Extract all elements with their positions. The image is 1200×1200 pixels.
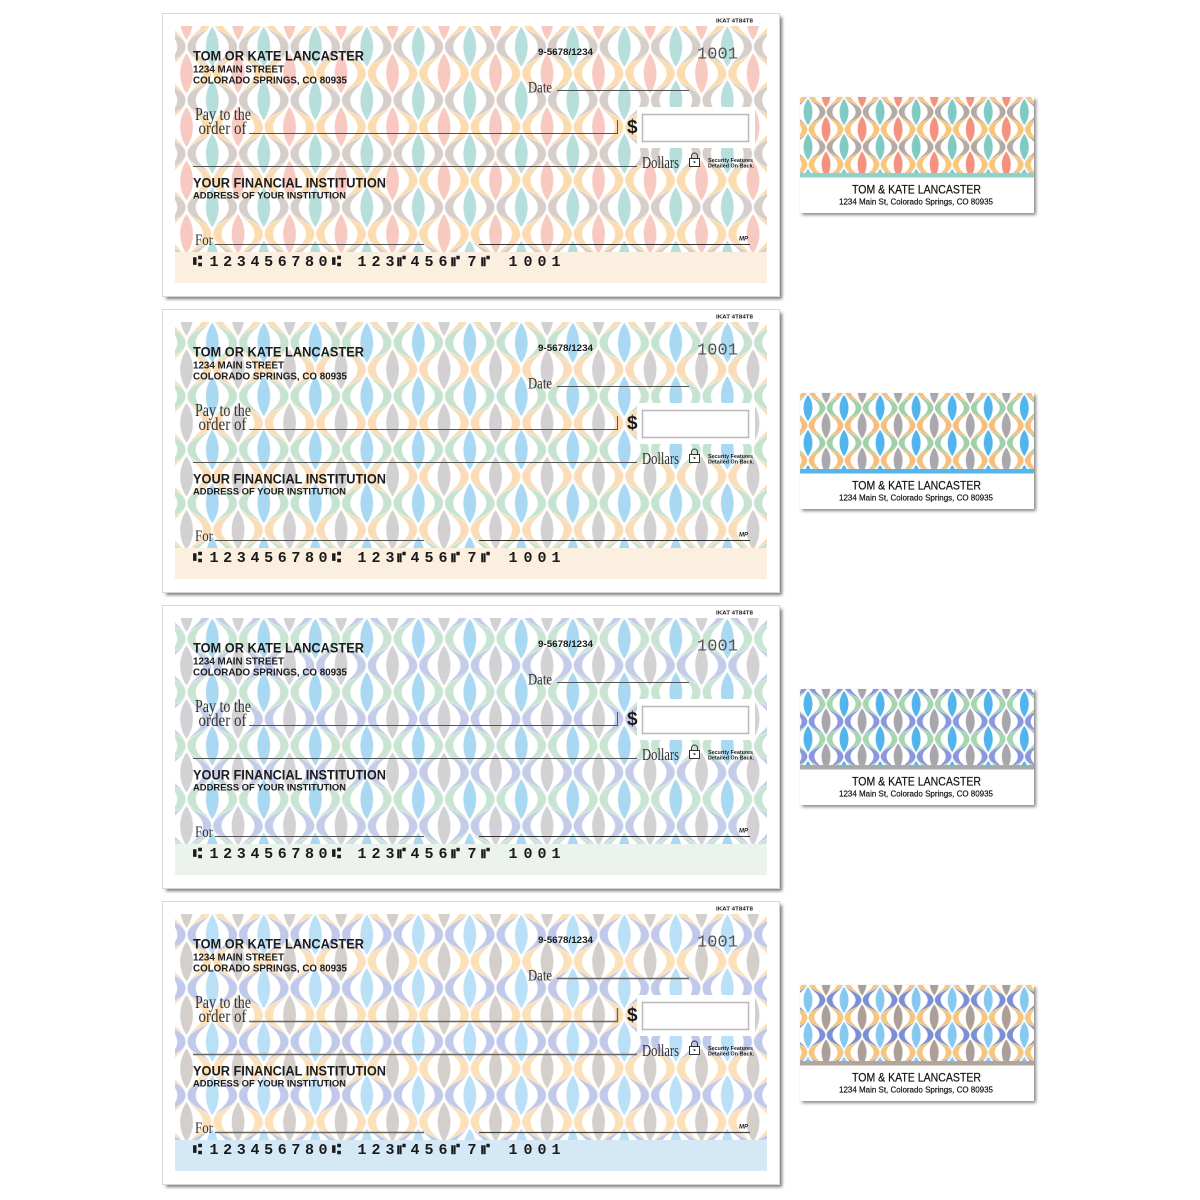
- icon: padlock: [690, 745, 700, 758]
- memo line: For: [195, 824, 214, 841]
- colour bar: [800, 173, 1034, 178]
- check shadow and paper: [162, 606, 782, 891]
- security note: [708, 1046, 755, 1057]
- style code: IKAT 4T84T8: [716, 19, 753, 25]
- amount line: Dollars: [642, 1041, 679, 1060]
- MICR line: ⑆123456780⑆123⑈456⑈7⑈1001: [193, 254, 561, 271]
- pattern background: [175, 26, 767, 252]
- payee field: [195, 992, 618, 1026]
- amount line: Dollars: [642, 153, 679, 172]
- check number: 1001: [697, 638, 738, 656]
- label pattern: [800, 985, 1034, 1061]
- amount panel: [637, 107, 755, 148]
- payee field: order of: [198, 118, 246, 138]
- bank: [193, 176, 386, 202]
- signature line: MP: [739, 829, 749, 835]
- MICR band: [175, 252, 767, 283]
- style code: IKAT 4T84T8: [716, 907, 753, 913]
- routing fraction: 9-5678/1234: [538, 343, 594, 354]
- label pattern: [800, 393, 1034, 469]
- MICR band: [175, 844, 767, 875]
- bank: ADDRESS OF YOUR INSTITUTION: [193, 191, 346, 202]
- dollar sign: $: [627, 117, 638, 138]
- pattern background: [175, 618, 767, 844]
- panel: check 2: [162, 310, 782, 595]
- account holder: [193, 48, 364, 86]
- security note: Detailed On Back.: [708, 163, 755, 169]
- payee field: Pay to the: [195, 696, 251, 716]
- security note: [708, 158, 755, 169]
- payee field: [195, 104, 618, 138]
- bank: [193, 1064, 386, 1090]
- colour bar: [800, 765, 1034, 770]
- payee field: [195, 696, 618, 730]
- MICR line: ⑆123456780⑆123⑈456⑈7⑈1001: [193, 550, 561, 567]
- account holder: 1234 MAIN STREET: [193, 360, 284, 371]
- MICR band: [175, 1140, 767, 1171]
- check shadow and paper: [162, 310, 782, 595]
- colour bar: [800, 469, 1034, 474]
- routing fraction: 9-5678/1234: [538, 639, 594, 650]
- MICR line: ⑆123456780⑆123⑈456⑈7⑈1001: [193, 1142, 561, 1159]
- security note: Detailed On Back.: [708, 755, 755, 761]
- bank: YOUR FINANCIAL INSTITUTION: [193, 1064, 386, 1079]
- signature line: MP: [739, 1125, 749, 1131]
- account holder: [193, 640, 364, 678]
- bank: [193, 472, 386, 498]
- account holder: COLORADO SPRINGS, CO 80935: [193, 76, 347, 86]
- label address: [839, 184, 993, 206]
- amount panel: [637, 995, 755, 1036]
- account holder: TOM OR KATE LANCASTER: [193, 640, 364, 656]
- amount line: Dollars: [642, 449, 679, 468]
- dollar sign: $: [627, 709, 638, 730]
- bank: ADDRESS OF YOUR INSTITUTION: [193, 487, 346, 498]
- label pattern: [800, 97, 1034, 173]
- bank: ADDRESS OF YOUR INSTITUTION: [193, 1079, 346, 1090]
- bank: YOUR FINANCIAL INSTITUTION: [193, 176, 386, 191]
- label address: [839, 1072, 993, 1094]
- panel: address label 2: [800, 393, 1036, 511]
- label address: 1234 Main St, Colorado Springs, CO 80935: [839, 788, 993, 798]
- account holder: COLORADO SPRINGS, CO 80935: [193, 372, 347, 382]
- icon: padlock: [690, 153, 700, 166]
- date field: Date: [528, 80, 552, 96]
- security note: Detailed On Back.: [708, 1051, 755, 1057]
- label pattern: [800, 689, 1034, 765]
- panel: check 1: [162, 14, 782, 299]
- security note: Detailed On Back.: [708, 459, 755, 465]
- account holder: COLORADO SPRINGS, CO 80935: [193, 964, 347, 974]
- account holder: 1234 MAIN STREET: [193, 64, 284, 75]
- bank: YOUR FINANCIAL INSTITUTION: [193, 472, 386, 487]
- payee field: order of: [198, 414, 246, 434]
- label shadow and paper: [800, 97, 1036, 215]
- label address: TOM & KATE LANCASTER: [852, 776, 981, 788]
- label address: 1234 Main St, Colorado Springs, CO 80935: [839, 1084, 993, 1094]
- payee field: Pay to the: [195, 992, 251, 1012]
- bank: YOUR FINANCIAL INSTITUTION: [193, 768, 386, 783]
- label shadow and paper: [800, 689, 1036, 807]
- memo line: For: [195, 528, 214, 545]
- routing fraction: 9-5678/1234: [538, 935, 594, 946]
- security note: Security Features: [708, 750, 753, 756]
- panel: address label 3: [800, 689, 1036, 807]
- dollar sign: $: [627, 413, 638, 434]
- label address: 1234 Main St, Colorado Springs, CO 80935: [839, 492, 993, 502]
- style code: IKAT 4T84T8: [716, 611, 753, 617]
- security note: [708, 454, 755, 465]
- payee field: [195, 400, 618, 434]
- account holder: TOM OR KATE LANCASTER: [193, 936, 364, 952]
- panel: address label 4: [800, 985, 1036, 1103]
- signature line: MP: [739, 533, 749, 539]
- check shadow and paper: [162, 14, 782, 299]
- signature line: MP: [739, 237, 749, 243]
- label shadow and paper: [800, 985, 1036, 1103]
- check number: 1001: [697, 46, 738, 64]
- amount panel: [637, 403, 755, 444]
- amount panel: [637, 699, 755, 740]
- icon: padlock: [690, 1041, 700, 1054]
- date field: Date: [528, 968, 552, 984]
- account holder: 1234 MAIN STREET: [193, 656, 284, 667]
- label address: 1234 Main St, Colorado Springs, CO 80935: [839, 196, 993, 206]
- label address: [839, 480, 993, 502]
- label address: TOM & KATE LANCASTER: [852, 480, 981, 492]
- check number: 1001: [697, 934, 738, 952]
- label address: TOM & KATE LANCASTER: [852, 1072, 981, 1084]
- icon: padlock: [690, 449, 700, 462]
- dollar sign: $: [627, 1005, 638, 1026]
- account holder: COLORADO SPRINGS, CO 80935: [193, 668, 347, 678]
- panel: check 3: [162, 606, 782, 891]
- account holder: TOM OR KATE LANCASTER: [193, 344, 364, 360]
- pattern background: [175, 914, 767, 1140]
- colour bar: [800, 1061, 1034, 1066]
- label shadow and paper: [800, 393, 1036, 511]
- memo line: For: [195, 232, 214, 249]
- bank: ADDRESS OF YOUR INSTITUTION: [193, 783, 346, 794]
- payee field: Pay to the: [195, 104, 251, 124]
- account holder: 1234 MAIN STREET: [193, 952, 284, 963]
- check shadow and paper: [162, 902, 782, 1187]
- MICR band: [175, 548, 767, 579]
- account holder: [193, 936, 364, 974]
- payee field: order of: [198, 1006, 246, 1026]
- security note: Security Features: [708, 158, 753, 164]
- panel: address label 1: [800, 97, 1036, 215]
- security note: [708, 750, 755, 761]
- account holder: TOM OR KATE LANCASTER: [193, 48, 364, 64]
- date field: Date: [528, 672, 552, 688]
- panel: check 4: [162, 902, 782, 1187]
- amount line: Dollars: [642, 745, 679, 764]
- memo line: For: [195, 1120, 214, 1137]
- routing fraction: 9-5678/1234: [538, 47, 594, 58]
- payee field: order of: [198, 710, 246, 730]
- bank: [193, 768, 386, 794]
- security note: Security Features: [708, 454, 753, 460]
- style code: IKAT 4T84T8: [716, 315, 753, 321]
- pattern background: [175, 322, 767, 548]
- account holder: [193, 344, 364, 382]
- security note: Security Features: [708, 1046, 753, 1052]
- MICR line: ⑆123456780⑆123⑈456⑈7⑈1001: [193, 846, 561, 863]
- payee field: Pay to the: [195, 400, 251, 420]
- label address: [839, 776, 993, 798]
- date field: Date: [528, 376, 552, 392]
- check number: 1001: [697, 342, 738, 360]
- label address: TOM & KATE LANCASTER: [852, 184, 981, 196]
